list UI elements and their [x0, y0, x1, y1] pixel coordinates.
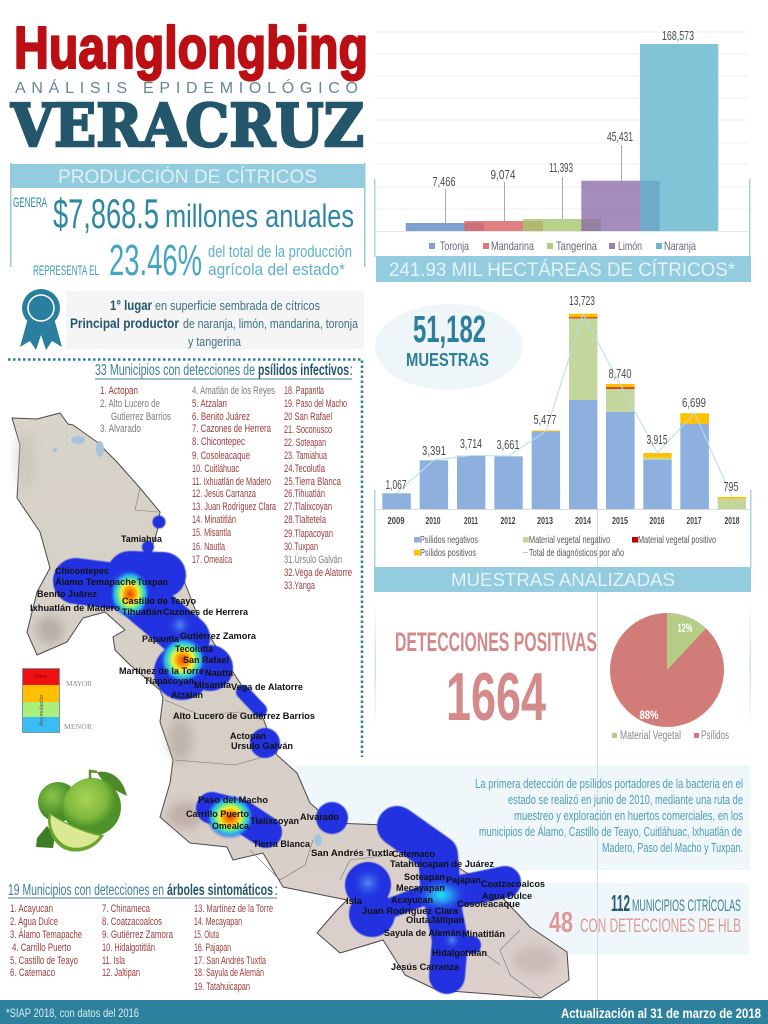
list: psílidos column 2: 12. Jesús Carranza — [192, 488, 257, 500]
label 88%: 88% — [640, 708, 659, 722]
legend: Psílidos positivos — [420, 547, 476, 559]
list: árboles column 3: 19. Tatahuicapan — [194, 981, 250, 993]
municipality labels: Chicontepec — [55, 566, 109, 577]
heading: 19 municipios árboles sintomáticos: árboles sintomáticos — [167, 882, 273, 899]
value labels: 3,714 — [460, 436, 482, 451]
year labels: 2014 — [575, 515, 591, 527]
municipality labels: Atzalan — [171, 690, 203, 701]
municipality labels: Papantla — [142, 634, 180, 645]
list: árboles column 3: 14. Mecayapan — [194, 916, 242, 928]
list: árboles column 2: 7. Chinameca — [102, 903, 151, 915]
heat zones árboles sintomáticos — [212, 808, 266, 832]
heat zones psílidos — [76, 516, 505, 976]
pale municipalities panel background — [480, 883, 749, 955]
list: psílidos column 3: 24.Tecolutla — [284, 463, 326, 475]
text line 2: de naranja, limón, mandarina, toronja — [183, 316, 359, 331]
list: árboles column 3: 15. Oluta — [194, 929, 219, 941]
value mandarina: 9,074 — [490, 167, 516, 182]
year labels: 2015 — [612, 515, 628, 527]
list: psílidos column 3 — [284, 385, 352, 592]
municipality labels: Tecolutla — [175, 644, 214, 655]
value labels: 8,740 — [608, 366, 632, 381]
value tangerina: 11,393 — [549, 160, 573, 175]
unit millones anuales: millones anuales — [165, 198, 354, 234]
year labels: 2010 — [426, 515, 441, 527]
list: psílidos column 3: 32.Vega de Alatorre — [284, 567, 352, 579]
title: Veracruz: VERACRUZ — [10, 91, 364, 160]
legend: Limón — [618, 239, 642, 253]
list: psílidos column 2: 16. Nautla — [192, 541, 226, 553]
banner: muestras analizadas — [374, 567, 751, 592]
list: psílidos column 3: 26.Tihuatlán — [284, 488, 325, 500]
list: árboles column 1: 3. Álamo Temapache — [10, 928, 82, 941]
text line 1: en superficie sembrada de cítricos — [155, 298, 320, 313]
municipal boundaries — [135, 488, 541, 998]
list: árboles column 3 — [194, 903, 273, 993]
municipality labels: Benito Juárez — [37, 589, 97, 600]
municipality labels: Agua Dulce — [482, 891, 532, 902]
municipality labels: Soteapan — [404, 872, 445, 883]
municipality labels: Acayucan — [391, 895, 433, 906]
year labels: 2018 — [724, 515, 740, 527]
municipality labels: Mecayapan — [396, 883, 445, 894]
icon: limes — [36, 771, 127, 852]
value labels: 6,699 — [682, 395, 706, 410]
terrain relief — [15, 430, 557, 974]
list: árboles column 3: 17. San Andrés Tuxtla — [194, 955, 267, 967]
year labels — [388, 515, 740, 527]
municipality labels: Hidalgotitlán — [432, 948, 487, 959]
icon: ribbon medal — [20, 289, 62, 350]
heading: 19 municipios árboles sintomáticos: 19 Municipios con detecciones en — [8, 882, 164, 899]
list: árboles column 3: 13. Martínez de la Torre — [194, 903, 273, 915]
value 1664: 1664 — [446, 659, 546, 735]
list: psílidos column 1 — [100, 385, 171, 435]
municipality labels: Carrillo Puerto — [186, 809, 249, 820]
municipality labels: Cazones de Herrera — [163, 607, 249, 618]
list: psílidos column 1: 2. Alto Lucero de — [100, 398, 160, 410]
list: árboles column 3: 16. Pajapan — [194, 942, 231, 954]
legend — [414, 534, 716, 559]
legend — [429, 239, 696, 253]
list: árboles column 1: 5. Castillo de Teayo — [10, 955, 78, 967]
year labels: 2013 — [537, 515, 553, 527]
municipality labels: Castillo de Teayo — [122, 596, 196, 607]
list: árboles column 2 — [102, 903, 174, 979]
municipality labels: Nautla — [205, 668, 234, 679]
list: psílidos column 2: 8. Chicontepec — [192, 436, 245, 448]
footer — [0, 1000, 768, 1024]
year labels: 2011 — [464, 515, 478, 527]
list: psílidos column 2: 13. Juan Rodríguez Clara — [192, 501, 277, 513]
municipality labels: Cosoleacaque — [457, 899, 520, 910]
bar naranja — [640, 44, 718, 231]
list: árboles column 3: 18. Sayula de Alemán — [194, 967, 264, 979]
callout: municipios citrícolas — [549, 890, 741, 939]
label 12%: 12% — [678, 621, 693, 635]
value limón: 45,431 — [607, 129, 633, 144]
pale info panel background — [295, 765, 750, 870]
list: psílidos column 1: 3. Alvarado — [100, 423, 141, 435]
panel border: psílidos infectivos — [8, 360, 362, 757]
list: psílidos column 3: 29.Tlapacoyan — [284, 528, 333, 540]
value labels: 795 — [724, 479, 738, 494]
list: psílidos column 2: 4. Amatlán de los Reyes — [192, 385, 275, 397]
lakes — [52, 436, 322, 846]
list: psílidos column 3: 28.Tlaltetela — [284, 514, 327, 526]
line total de diagnósticos — [396, 314, 732, 497]
bar limón — [581, 181, 660, 231]
list: psílidos column 3: 33.Yanga — [284, 580, 316, 592]
banner: muestras analizadas: MUESTRAS ANALIZADAS — [451, 570, 675, 590]
value labels: 13,723 — [569, 293, 595, 308]
value labels: 3,661 — [496, 437, 520, 452]
list: árboles column 2: 10. Hidalgotitlán — [102, 942, 155, 954]
municipality labels: Alvarado — [300, 812, 339, 823]
list: árboles column 2: 11. Isla — [102, 955, 126, 967]
municipality labels: Oluta — [406, 915, 431, 926]
list: psílidos column 2: 15. Misantla — [192, 527, 232, 539]
municipality labels: Tuxpan — [137, 577, 168, 588]
list: árboles column 2: 12. Jaltipan — [102, 967, 140, 979]
municipality labels: Isla — [346, 896, 363, 907]
heading: DETECCIONES POSITIVAS — [395, 627, 597, 657]
callout: 51,182 muestras — [375, 304, 523, 390]
list: árboles column 1: 4. Carrillo Puerto — [12, 942, 71, 954]
list: árboles column 2: 8. Coatzacoalcos — [102, 916, 162, 928]
list: psílidos column 3: 20 San Rafael — [284, 411, 332, 423]
map: Veracruz — [12, 413, 569, 998]
list: psílidos column 2: 5. Atzalan — [192, 398, 227, 410]
label genera: GENERA — [13, 194, 47, 210]
panel: detecciones positivas — [374, 600, 751, 735]
municipality labels: San Andrés Tuxtla — [311, 848, 395, 859]
list: psílidos column 2: 11. Ixhuatlán de Madero — [192, 476, 271, 488]
description line 1: del total de la producción — [208, 242, 352, 261]
municipality labels: Tamiahua — [121, 534, 163, 545]
municipality labels: Martínez de la Torre — [119, 666, 204, 677]
heading: 33 municipios psílidos infectivos: psílidos infectivos — [258, 362, 349, 379]
list: psílidos column 3: 18. Papantla — [284, 385, 325, 397]
municipality labels: San Rafael — [183, 655, 229, 666]
municipality labels: Tihuatlán — [122, 607, 162, 618]
legend: Psílidos negativos — [420, 534, 478, 546]
municipality labels: Sayula de Alemán — [384, 928, 461, 939]
list: psílidos column 3: 25.Tierra Blanca — [284, 476, 342, 488]
municipality labels: Minatitlán — [462, 929, 505, 940]
value 112: 112 — [611, 890, 630, 916]
legend: Material vegetal positivo — [638, 534, 716, 546]
legend: Total de diagnósticos por año — [529, 547, 624, 559]
list: psílidos column 2: 17. Omealca — [192, 554, 233, 566]
state outline — [12, 413, 569, 998]
municipality labels: Paso del Macho — [198, 795, 268, 806]
source note: *SIAP 2018, con datos del 2016 — [6, 1006, 139, 1020]
value labels: 1,067 — [386, 477, 406, 492]
list: árboles column 1: 6. Catemaco — [10, 967, 55, 979]
bar tangerina — [523, 219, 601, 231]
list: árboles column 2: 9. Gutiérrez Zamora — [102, 929, 174, 941]
municipality labels: Catemaco — [392, 849, 435, 860]
banner: hectáreas de cítricos: 241.93 MIL HECTÁREAS DE CÍTRICOS* — [389, 260, 736, 281]
info text: primera detección — [475, 777, 743, 855]
heading: 33 municipios psílidos infectivos: : — [349, 362, 353, 379]
municipality labels: Ursulo Galván — [231, 741, 293, 752]
label acumulación: Acumulación — [39, 694, 45, 726]
list: psílidos column 3: 31.Úrsulo Galván — [284, 553, 342, 566]
legend: acumulación — [22, 668, 92, 732]
year labels: 2009 — [388, 515, 405, 527]
list: árboles column 1: 1. Acayucan — [10, 903, 53, 915]
vertical divider — [596, 508, 598, 1000]
label menor: MENOR — [64, 722, 92, 731]
value labels — [386, 293, 738, 494]
bars red material vegetal positivo — [569, 317, 635, 389]
list: psílidos column 3: 30.Tuxpan — [284, 541, 318, 553]
municipality labels: Ixhuatlán de Madero — [30, 603, 120, 614]
value labels: 3,391 — [422, 443, 446, 458]
label foco: Foco — [35, 674, 47, 680]
list: psílidos column 2: 10. Cuitláhuac — [192, 463, 239, 475]
value naranja: 168,573 — [662, 28, 694, 43]
legend: Naranja — [664, 239, 696, 253]
list: psílidos column 2: 14. Minatitlán — [192, 514, 236, 526]
list: psílidos column 1: Gutierrez Barrios — [111, 411, 171, 423]
legend: Mandarina — [491, 239, 534, 253]
list: psílidos column 2: 9. Cosoleacaque — [192, 450, 250, 462]
bars orange psílidos positivos — [532, 314, 746, 499]
municipality labels: Omealca — [212, 821, 250, 832]
value 48: 48 — [549, 907, 573, 939]
municipality labels: Jesús Carranza — [391, 962, 460, 973]
heading: 33 municipios psílidos infectivos: 33 Municipios con detecciones de — [95, 362, 255, 379]
value labels: 5,477 — [534, 412, 556, 427]
value 23.46%: 23.46% — [109, 236, 202, 285]
value: 51,182 — [413, 309, 486, 351]
municipality labels: Actopan — [230, 731, 266, 742]
municipality labels: Tierra Blanca — [253, 839, 311, 850]
municipality labels: Pajapan — [446, 875, 481, 886]
legend: Tangerina — [556, 239, 597, 253]
municipality labels: Misantla — [194, 680, 232, 691]
bar toronja — [406, 223, 484, 231]
list: psílidos column 3: 23. Tamiahua — [284, 450, 328, 462]
subtitle: análisis epidemiológico: ANÁLISIS EPIDEMIOLÓGICO — [15, 78, 358, 97]
list: psílidos column 1: 1. Actopan — [100, 385, 138, 397]
text line 1 bold: 1° lugar — [110, 298, 153, 313]
label: MUESTRAS — [406, 350, 489, 370]
heading band — [10, 164, 365, 188]
value $7,868.5: $7,868.5 — [53, 190, 159, 237]
municipality labels: Juan Rodríguez Clara — [362, 906, 459, 917]
bar mandarina — [464, 221, 543, 231]
list: psílidos column 3: 22. Soteapan — [284, 437, 326, 449]
bars green material vegetal negativo — [569, 318, 746, 509]
list: árboles column 1 — [10, 903, 82, 979]
municipality labels: Gutiérrez Zamora — [180, 631, 257, 642]
list: psílidos column 3: 21. Soconusco — [284, 424, 332, 436]
value labels: 3,915 — [646, 432, 668, 447]
value toronja: 7,466 — [432, 174, 456, 189]
heading: 19 municipios árboles sintomáticos: : — [274, 882, 278, 899]
list: psílidos column 2 — [192, 385, 277, 566]
list: árboles column 1: 2. Agua Dulce — [10, 916, 58, 928]
year labels: 2016 — [650, 515, 665, 527]
municipality labels: Tlalixcoyan — [250, 816, 299, 827]
label representa el: REPRESENTA EL — [33, 262, 99, 278]
year labels: 2012 — [500, 515, 516, 527]
municipality labels: Vega de Alatorre — [231, 682, 303, 693]
legend: Psílidos — [701, 730, 729, 742]
bars blue psílidos negativos — [382, 400, 709, 509]
description line 2: agrícola del estado* — [208, 260, 345, 279]
list: psílidos column 3: 27.Tlalixcoyan — [284, 501, 332, 513]
municipality labels: Tlapacoyan — [144, 676, 194, 687]
label mayor: MAYOR — [66, 679, 92, 688]
text line 3: y tangerina — [188, 334, 242, 349]
municipality labels: Alto Lucero de Gutiérrez Barrios — [173, 711, 315, 722]
municipality labels — [30, 534, 545, 973]
municipality labels: Álamo Temapache — [55, 577, 136, 588]
year labels: 2017 — [686, 515, 702, 527]
municipality labels: Jáltipan — [430, 915, 464, 926]
legend: Material Vegetal — [620, 730, 681, 742]
legend: Material vegetal negativo — [529, 534, 610, 546]
text line 2 bold: Principal productor — [70, 316, 180, 331]
chart: pie detecciones — [610, 613, 729, 742]
panel: primer lugar — [66, 291, 364, 349]
chart: superficie de cítricos — [374, 28, 750, 257]
municipality labels: Tatahuicapan de Juárez — [390, 859, 494, 870]
title: Huanglongbing: Huanglongbing — [14, 15, 368, 81]
panel: producción de cítricos — [10, 163, 366, 285]
chart: muestras analizadas — [374, 293, 752, 568]
list: psílidos column 2: 6. Benito Juárez — [192, 411, 250, 423]
heading text: PRODUCCIÓN DE CÍTRICOS — [58, 166, 317, 188]
list: psílidos column 3: 19. Paso del Macho — [284, 398, 347, 410]
list: psílidos column 2: 7. Cazones de Herrera — [192, 423, 272, 435]
legend: Toronja — [440, 239, 469, 253]
municipality labels: Coatzacoalcos — [481, 879, 545, 890]
